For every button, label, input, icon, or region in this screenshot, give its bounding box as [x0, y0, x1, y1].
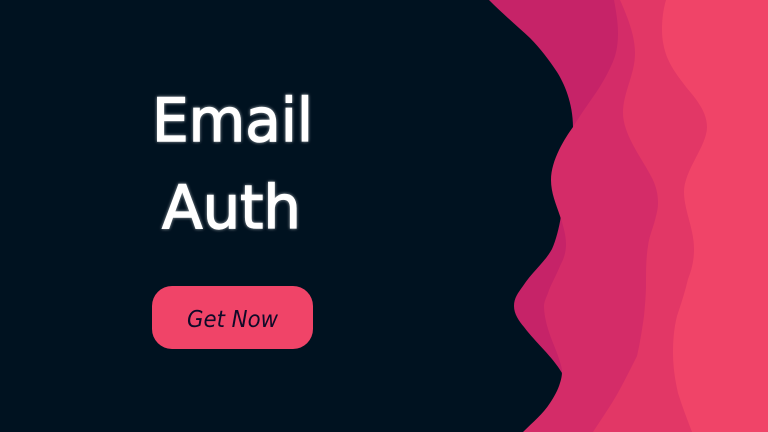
title line: Auth: Auth — [162, 173, 301, 243]
wave layer: darkest magenta — [489, 0, 768, 432]
button background — [152, 286, 313, 349]
button: Get Now — [152, 286, 313, 349]
wave layers — [489, 0, 768, 432]
title — [152, 86, 313, 243]
title line: Email: Email — [152, 86, 313, 156]
wave layer: rose — [593, 0, 768, 432]
wave layer: coral pink — [662, 0, 768, 432]
button label: Get Now — [187, 307, 278, 333]
wave layer: deep pink — [523, 0, 768, 432]
